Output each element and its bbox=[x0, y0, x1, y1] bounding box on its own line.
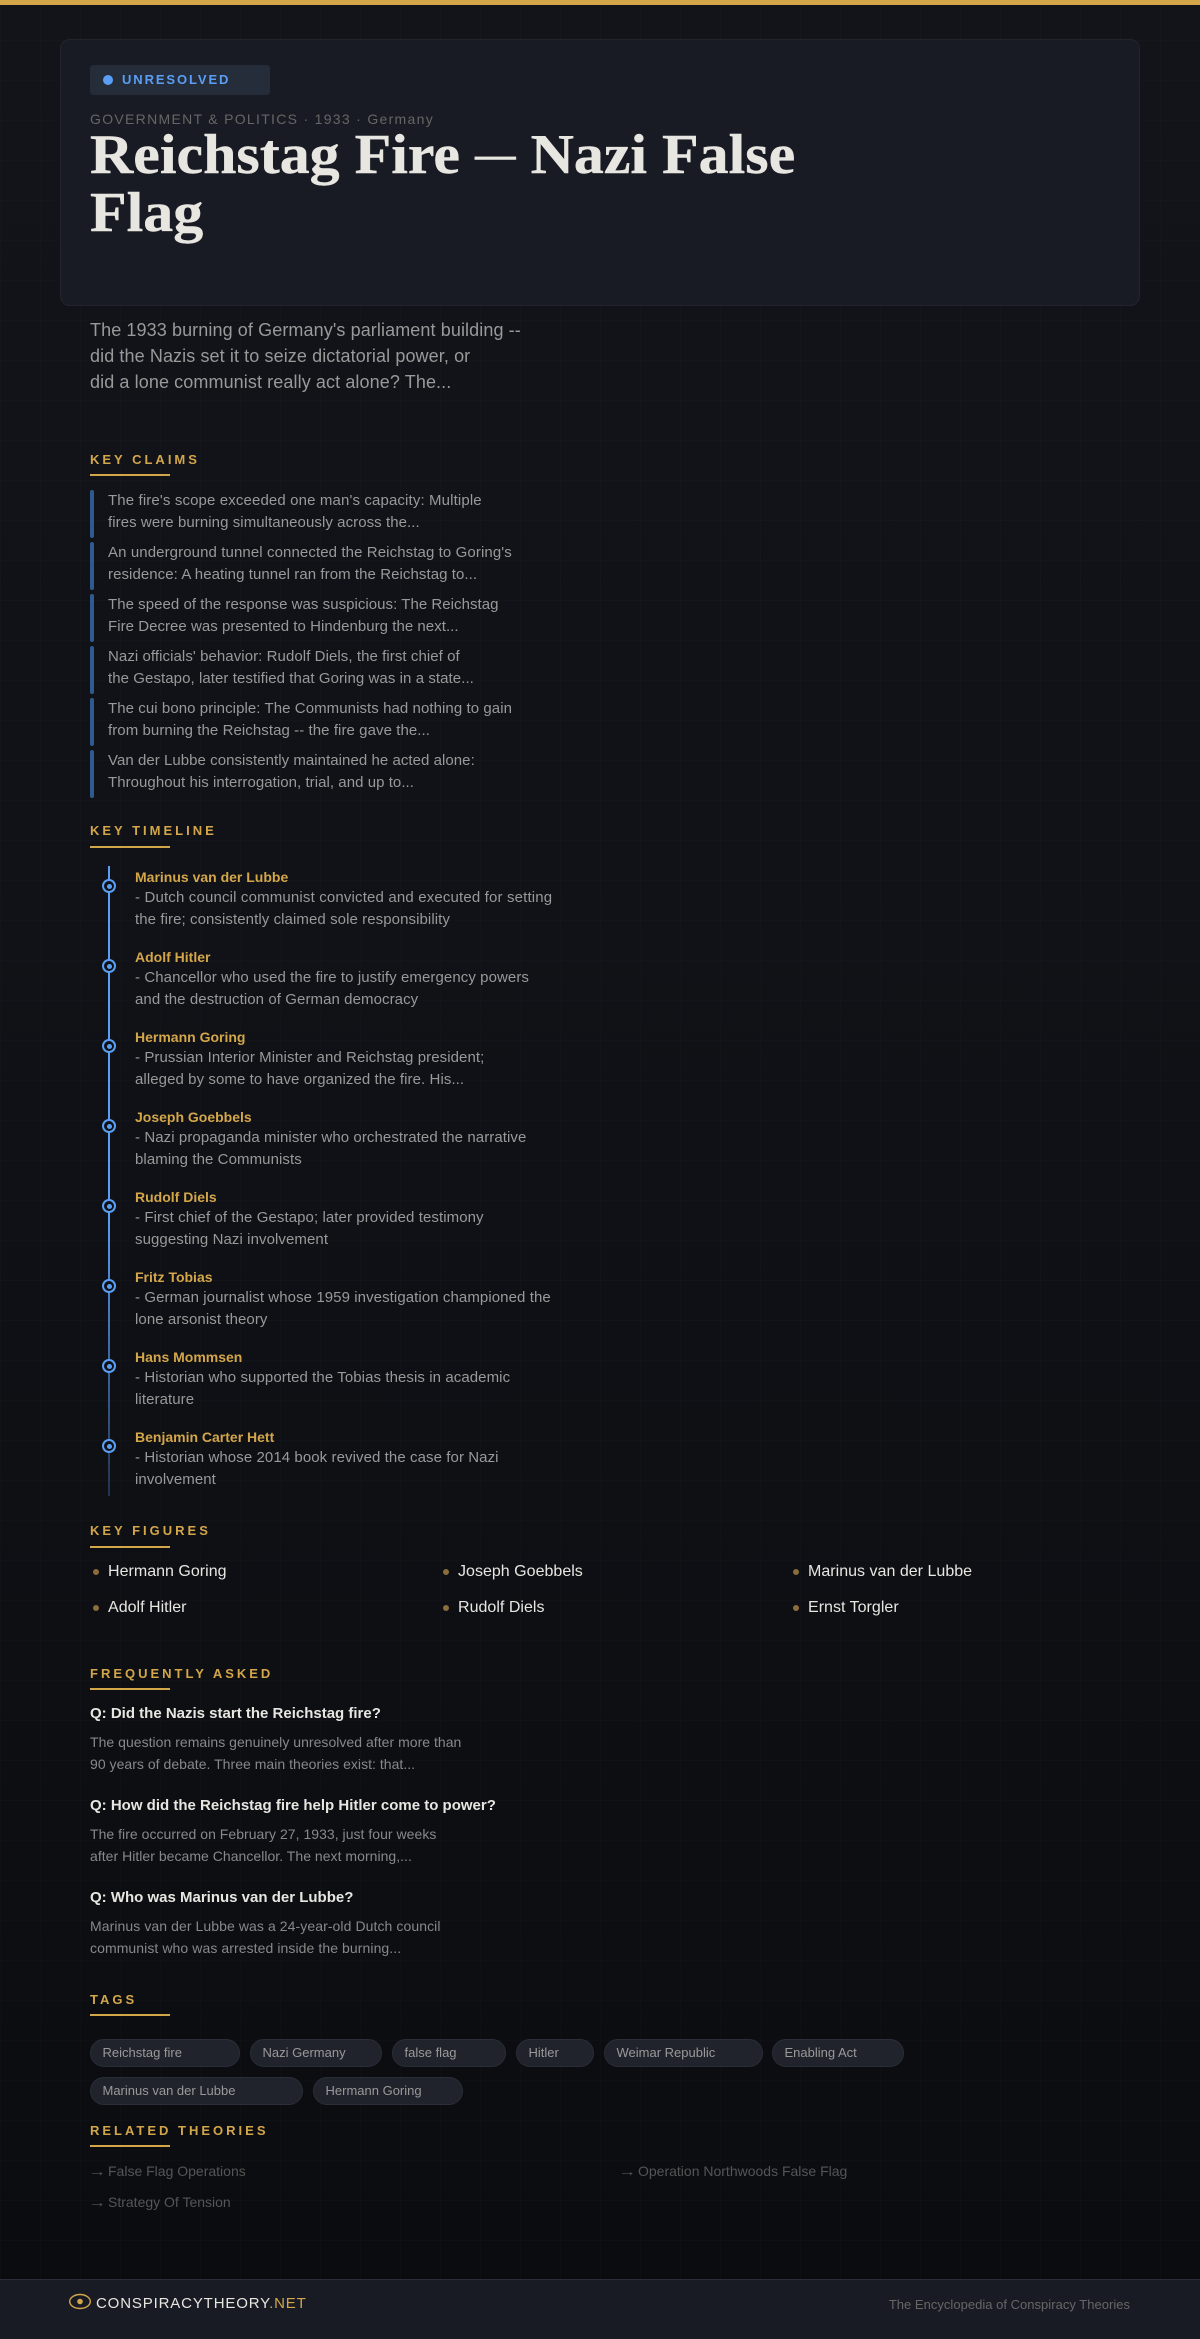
top accent bar bbox=[0, 0, 1200, 5]
claim 6: Van der Lubbe consistently maintained he acted alone: bbox=[108, 752, 475, 769]
claim 4: the Gestapo, later testified that Goring was in a state... bbox=[108, 670, 474, 687]
tag: Marinus van der Lubbe bbox=[90, 2077, 303, 2105]
claim 6 bbox=[90, 750, 475, 798]
link: Operation Northwoods False Flag: Operation Northwoods False Flag bbox=[638, 2163, 847, 2179]
faq 3 bbox=[90, 1889, 441, 1956]
panel: frequently asked bbox=[90, 1666, 496, 1956]
tag: Nazi Germany: Nazi Germany bbox=[262, 2045, 346, 2060]
heading: key figures: KEY FIGURES bbox=[90, 1523, 211, 1538]
icon: eye logo bbox=[69, 2294, 91, 2310]
faq 2: after Hitler became Chancellor. The next morning,... bbox=[90, 1848, 412, 1864]
panel: key claims bbox=[90, 452, 512, 798]
claim 4: Nazi officials' behavior: Rudolf Diels, the first chief of bbox=[108, 648, 460, 665]
tag: Reichstag fire bbox=[90, 2039, 240, 2067]
link: False Flag Operations: → bbox=[88, 2163, 106, 2179]
tag: Hitler bbox=[516, 2039, 594, 2067]
badge label: UNRESOLVED bbox=[122, 72, 230, 87]
event 2: and the destruction of German democracy bbox=[135, 991, 418, 1008]
status badge: unresolved bbox=[90, 65, 270, 95]
faq 1: 90 years of debate. Three main theories exist: that... bbox=[90, 1756, 415, 1772]
claim 2: An underground tunnel connected the Reichstag to Goring's bbox=[108, 544, 512, 561]
claim 3: Fire Decree was presented to Hindenburg the next... bbox=[108, 618, 459, 635]
figure: Marinus van der Lubbe: Marinus van der Lubbe bbox=[808, 1563, 972, 1580]
faq 3: communist who was arrested inside the burning... bbox=[90, 1940, 401, 1956]
event 4: - Nazi propaganda minister who orchestrated the narrative bbox=[135, 1129, 526, 1146]
event 8: Benjamin Carter Hett bbox=[135, 1429, 274, 1445]
event 7: literature bbox=[135, 1391, 194, 1408]
event 6: Fritz Tobias bbox=[135, 1269, 213, 1285]
figure: Rudolf Diels: Rudolf Diels bbox=[458, 1599, 544, 1616]
faq 3: Marinus van der Lubbe was a 24-year-old Dutch council bbox=[90, 1918, 441, 1934]
link: False Flag Operations: False Flag Operations bbox=[108, 2163, 246, 2179]
faq 2: Q: How did the Reichstag fire help Hitler come to power? bbox=[90, 1797, 496, 1814]
event 7: Hans Mommsen bbox=[135, 1349, 242, 1365]
event 6 bbox=[102, 1269, 551, 1328]
faq 1: The question remains genuinely unresolved after more than bbox=[90, 1734, 461, 1750]
faq 1: Q: Did the Nazis start the Reichstag fire? bbox=[90, 1705, 381, 1722]
heading: tags: TAGS bbox=[90, 1992, 137, 2007]
event 5 bbox=[102, 1189, 484, 1248]
tag: Enabling Act: Enabling Act bbox=[784, 2045, 857, 2060]
footer tagline: The Encyclopedia of Conspiracy Theories bbox=[889, 2297, 1130, 2312]
tag: Marinus van der Lubbe: Marinus van der Lubbe bbox=[102, 2083, 235, 2098]
claim 1 bbox=[90, 490, 482, 538]
logo wordmark: CONSPIRACYTHEORY.NET bbox=[96, 2295, 307, 2312]
category meta line: GOVERNMENT & POLITICS · 1933 · Germany bbox=[90, 111, 434, 127]
link: Strategy Of Tension: → bbox=[88, 2194, 106, 2210]
event 5: - First chief of the Gestapo; later provided testimony bbox=[135, 1209, 484, 1226]
lead summary text bbox=[90, 320, 521, 392]
figure: Adolf Hitler: Adolf Hitler bbox=[108, 1599, 186, 1616]
icon: status dot bbox=[103, 75, 113, 85]
event 2: - Chancellor who used the fire to justify emergency powers bbox=[135, 969, 529, 986]
tag: Reichstag fire: Reichstag fire bbox=[102, 2045, 182, 2060]
lead summary text: The 1933 burning of Germany's parliament building -- bbox=[90, 320, 521, 340]
tag: Enabling Act bbox=[772, 2039, 904, 2067]
panel: header card bbox=[60, 39, 1140, 306]
panel: tags bbox=[90, 1992, 904, 2105]
faq 1 bbox=[90, 1705, 461, 1772]
timeline rail bbox=[108, 866, 110, 1496]
event 2: Adolf Hitler bbox=[135, 949, 210, 965]
link: Operation Northwoods False Flag: → bbox=[618, 2163, 636, 2179]
event 3: - Prussian Interior Minister and Reichstag president; bbox=[135, 1049, 484, 1066]
tag: Nazi Germany bbox=[250, 2039, 382, 2067]
claim 1: The fire's scope exceeded one man's capacity: Multiple bbox=[108, 492, 482, 509]
event 6: - German journalist whose 1959 investigation championed the bbox=[135, 1289, 551, 1306]
event 1: the fire; consistently claimed sole responsibility bbox=[135, 911, 450, 928]
event 8: - Historian whose 2014 book revived the case for Nazi bbox=[135, 1449, 499, 1466]
faq 2: The fire occurred on February 27, 1933, just four weeks bbox=[90, 1826, 436, 1842]
tag: Hermann Goring: Hermann Goring bbox=[326, 2083, 422, 2098]
event 8 bbox=[102, 1429, 499, 1488]
claim 5: The cui bono principle: The Communists had nothing to gain bbox=[108, 700, 512, 717]
title: Reichstag Fire — Nazi False bbox=[90, 124, 795, 186]
heading: frequently asked: FREQUENTLY ASKED bbox=[90, 1666, 273, 1681]
claim 4 bbox=[90, 646, 474, 694]
event 8: involvement bbox=[135, 1471, 216, 1488]
tag: false flag bbox=[392, 2039, 506, 2067]
event 6: lone arsonist theory bbox=[135, 1311, 268, 1328]
claim 5: from burning the Reichstag -- the fire gave the... bbox=[108, 722, 430, 739]
faq 2 bbox=[90, 1797, 496, 1864]
lead summary text: did the Nazis set it to seize dictatorial power, or bbox=[90, 346, 470, 366]
event 1: - Dutch council communist convicted and executed for setting bbox=[135, 889, 552, 906]
event 2 bbox=[102, 949, 529, 1008]
tag: Hermann Goring bbox=[313, 2077, 463, 2105]
panel: key figures bbox=[90, 1523, 972, 1616]
title bbox=[90, 124, 795, 244]
event 7: - Historian who supported the Tobias thesis in academic bbox=[135, 1369, 510, 1386]
claim 2 bbox=[90, 542, 512, 590]
claim 1: fires were burning simultaneously across the... bbox=[108, 514, 420, 531]
panel: key timeline bbox=[90, 823, 552, 1496]
lead summary text: did a lone communist really act alone? The... bbox=[90, 372, 451, 392]
event 1 bbox=[102, 869, 552, 928]
claim 6: Throughout his interrogation, trial, and up to... bbox=[108, 774, 414, 791]
faq 3: Q: Who was Marinus van der Lubbe? bbox=[90, 1889, 353, 1906]
event 4: Joseph Goebbels bbox=[135, 1109, 252, 1125]
heading: key timeline: KEY TIMELINE bbox=[90, 823, 217, 838]
tag: false flag: false flag bbox=[404, 2045, 457, 2060]
claim 2: residence: A heating tunnel ran from the Reichstag to... bbox=[108, 566, 477, 583]
event 7 bbox=[102, 1349, 510, 1408]
event 3 bbox=[102, 1029, 484, 1088]
event 4 bbox=[102, 1109, 526, 1168]
event 3: alleged by some to have organized the fire. His... bbox=[135, 1071, 464, 1088]
claim 5 bbox=[90, 698, 512, 746]
claim 3 bbox=[90, 594, 498, 642]
link: Strategy Of Tension: Strategy Of Tension bbox=[108, 2194, 231, 2210]
heading: related theories: RELATED THEORIES bbox=[90, 2123, 268, 2138]
title: Flag bbox=[90, 182, 203, 244]
panel: footer bbox=[0, 2279, 1200, 2339]
event 4: blaming the Communists bbox=[135, 1151, 302, 1168]
event 3: Hermann Goring bbox=[135, 1029, 245, 1045]
figure: Ernst Torgler: Ernst Torgler bbox=[808, 1599, 899, 1616]
tag: Weimar Republic bbox=[604, 2039, 763, 2067]
event 5: Rudolf Diels bbox=[135, 1189, 217, 1205]
figure: Joseph Goebbels: Joseph Goebbels bbox=[458, 1563, 583, 1580]
panel: related theories bbox=[88, 2123, 847, 2210]
event 5: suggesting Nazi involvement bbox=[135, 1231, 328, 1248]
claim 3: The speed of the response was suspicious: The Reichstag bbox=[108, 596, 498, 613]
event 1: Marinus van der Lubbe bbox=[135, 869, 288, 885]
figure: Hermann Goring: Hermann Goring bbox=[108, 1563, 227, 1580]
heading: key claims: KEY CLAIMS bbox=[90, 452, 200, 467]
tag: Weimar Republic: Weimar Republic bbox=[616, 2045, 715, 2060]
tag: Hitler: Hitler bbox=[528, 2045, 559, 2060]
